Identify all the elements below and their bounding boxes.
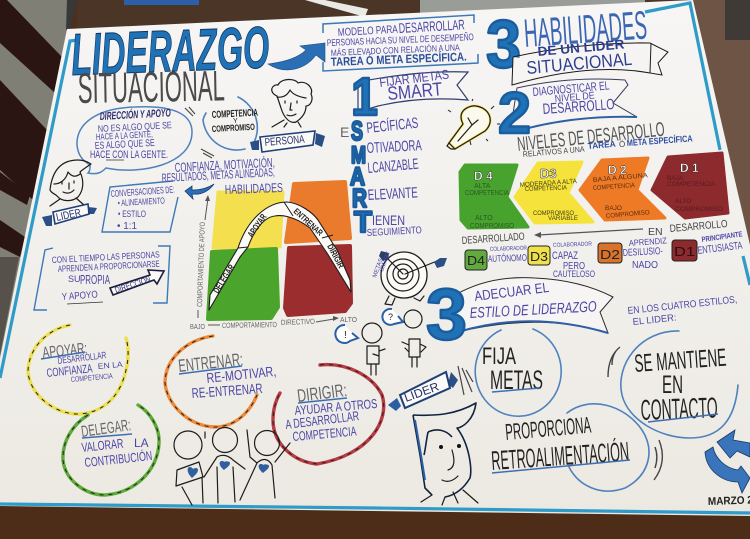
panel: D1 maroon xyxy=(652,153,728,218)
title: SITUACIONAL xyxy=(77,62,225,113)
icon: lider xyxy=(42,160,97,226)
panel: D3 yellow: COMPROMISO xyxy=(533,210,574,217)
circle: fija metas: FIJA xyxy=(482,343,516,370)
banner: diagnosticar: DESARROLLO xyxy=(542,96,615,118)
chart: situational leadership quadrants xyxy=(190,182,357,331)
circle: entrenar: RE-ENTRENAR xyxy=(191,380,263,401)
legend: D3 colaborador xyxy=(528,242,595,279)
panel: D4 green: COMPETENCIA xyxy=(465,190,509,197)
x axis: DIRECTIVO xyxy=(281,317,315,327)
speech bubble: direccion y apoyo: NO ES ALGO QUE SE xyxy=(98,120,172,135)
icon: team with hearts xyxy=(174,428,290,505)
callout: competencia y compromiso: Y xyxy=(233,118,238,125)
legend: D3 colaborador: D3 xyxy=(530,249,548,264)
circle: se mantiene en contacto: EN xyxy=(662,371,683,399)
legend: D4 autonomo xyxy=(465,246,528,270)
quadrant: delegar green xyxy=(208,249,278,319)
circle: apoyar: APOYAR: xyxy=(42,340,88,362)
curve ribbon xyxy=(209,202,351,310)
circle: dirigir: COMPETENCIA xyxy=(292,423,357,444)
arrow: en desarrollo to desarrollado: EN xyxy=(648,226,663,238)
quadrant: apoyar yellow xyxy=(213,192,283,248)
icon: target: SMART xyxy=(379,251,392,273)
heading: niveles de desarrollo: TAREA xyxy=(587,139,616,151)
legend: D3 colaborador: PERO xyxy=(563,261,585,272)
banner: adecuar el estilo xyxy=(455,278,613,333)
panel: D3 yellow: VARIABLE xyxy=(548,215,579,222)
legend: D2 desilusionado: DESILUSIO- xyxy=(623,246,663,259)
arrow: en desarrollo to desarrollado: DESARROLLO xyxy=(669,218,728,235)
panel: con el tiempo: SU xyxy=(68,274,81,284)
banner: de un lider situacional: DE UN LIDER xyxy=(537,36,626,59)
legend: D4 autonomo: D4 xyxy=(467,253,485,268)
x axis xyxy=(190,315,357,331)
list: smart acronym: IENEN xyxy=(372,212,405,228)
number 2: 2 xyxy=(498,81,531,146)
panel: D2 orange: BAJO xyxy=(605,205,622,212)
banner: adecuar el estilo: ADECUAR EL xyxy=(473,279,550,304)
title xyxy=(70,14,270,113)
icon: target: METAS xyxy=(372,258,385,279)
heading: 3 habilidades: 3 xyxy=(486,6,521,82)
circle: proporciona retroalimentacion: PROPORCIONA xyxy=(504,412,592,445)
list: smart acronym: S xyxy=(351,116,363,146)
x axis: BAJO xyxy=(190,322,205,331)
banner: fijar metas smart: SMART xyxy=(387,79,444,105)
list: smart acronym: SEGUIMIENTO xyxy=(367,225,422,239)
circle: apoyar: CONFIANZA xyxy=(46,361,93,380)
circle: delegar: DELEGAR: xyxy=(80,417,132,441)
heading: 3 habilidades xyxy=(486,4,668,85)
text block: en los cuatro estilos: EL LIDER: xyxy=(632,312,677,328)
icon: people talking: ? xyxy=(388,312,393,322)
panel: con el tiempo: APRENDEN A PROPORCIONARSE xyxy=(58,259,160,274)
callout: competencia y compromiso: COMPROMISO xyxy=(212,122,255,134)
panel: conversaciones: CONVERSACIONES DE: xyxy=(110,185,175,200)
panel: D1 maroon: COMPETENCIA xyxy=(667,181,716,188)
banner: de un lider situacional: SITUACIONAL xyxy=(526,49,633,78)
number 3: 3 xyxy=(426,275,467,355)
circle: proporciona retroalimentacion xyxy=(490,404,662,491)
banner: persona: PERSONA xyxy=(264,134,306,149)
banner: diagnosticar xyxy=(510,78,637,133)
panel: D4 green: ALTA xyxy=(474,183,491,190)
curve ribbon: ENTRENAR xyxy=(292,206,325,238)
banner: de un lider situacional xyxy=(512,36,668,85)
banner: diagnosticar: DIAGNOSTICAR EL xyxy=(532,78,610,99)
panel: D4 green: COMPROMISO xyxy=(470,223,514,230)
circle: apoyar: DESARROLLAR xyxy=(57,350,107,367)
list: smart acronym: PECÍFICAS xyxy=(366,115,419,137)
panel: D1 maroon: BAJA xyxy=(667,175,684,182)
icon: light bulb xyxy=(447,99,500,149)
quadrant: dirigir maroon xyxy=(285,246,351,315)
circle: fija metas: METAS xyxy=(490,365,543,395)
panel: con el tiempo xyxy=(34,246,170,310)
list: smart acronym xyxy=(340,115,422,239)
callout: competencia y compromiso: COMPETENCIA xyxy=(212,108,258,121)
arrow: direccion: DIRECCIÓN xyxy=(114,274,152,295)
panel: definition: MÁS ELEVADO CON RELACIÓN A UNA xyxy=(331,42,460,58)
legend: D3 colaborador: COLABORADOR xyxy=(553,242,593,249)
text block: confianza, motivacion xyxy=(161,155,283,197)
circle: apoyar: COMPETENCIA xyxy=(70,371,113,384)
legend: D2 desilusionado: APRENDIZ xyxy=(628,235,667,248)
callout: competencia y compromiso xyxy=(203,97,258,150)
panel: D4 green: D 4 xyxy=(474,169,493,183)
circle: delegar: VALORAR xyxy=(81,436,124,455)
panel: definition: MODELO PARA xyxy=(337,24,399,39)
circle: dirigir xyxy=(273,365,384,464)
circle: dirigir: DIRIGIR: xyxy=(296,380,348,406)
panel: D3 yellow: D3 xyxy=(540,166,557,181)
legend: D4 autonomo: COLABORADOR xyxy=(490,246,528,253)
panel: D3 yellow xyxy=(515,162,593,223)
panel: conversaciones xyxy=(102,181,178,232)
list: smart acronym: E xyxy=(340,124,349,140)
panel: D3 yellow: COMPETENCIA xyxy=(525,185,568,193)
panel: D2 orange xyxy=(580,158,665,220)
legend: D3 colaborador: CAPAZ xyxy=(552,250,578,262)
panel: conversaciones: • ALINEAMIENTO xyxy=(118,196,165,208)
heading: niveles de desarrollo xyxy=(516,119,693,159)
arrow: en desarrollo to desarrollado xyxy=(461,218,728,247)
panel: D1 maroon: COMPROMISO xyxy=(675,206,723,213)
legend: D3 colaborador: CAUTELOSO xyxy=(553,269,595,279)
circle: entrenar xyxy=(165,336,277,427)
curve ribbon: DIRIGIR xyxy=(325,242,346,270)
banner: lider large: LIDER xyxy=(402,379,441,405)
number 1: 1 xyxy=(351,67,378,127)
circle: fija metas xyxy=(458,329,561,416)
legend: D2 desilusionado: NADO xyxy=(632,260,658,271)
quadrant: entrenar orange xyxy=(286,182,350,242)
list: smart acronym: M xyxy=(351,142,366,169)
legend: D4 autonomo: AUTÓNOMO xyxy=(488,253,527,265)
panel: D2 orange: COMPROMISO xyxy=(606,209,650,220)
arrow: en desarrollo to desarrollado: DESARROLLADO xyxy=(461,231,525,247)
panel: D2 orange: COMPETENCIA xyxy=(593,182,636,192)
title: LIDERAZGO xyxy=(70,14,270,88)
panel: definition: PERSONAS HACIA SU NIVEL DE DESEMPEÑO xyxy=(327,32,474,49)
speech bubble: direccion y apoyo: HACE A LA GENTE, xyxy=(96,129,153,142)
heading: niveles de desarrollo: RELATIVOS A UNA xyxy=(522,145,586,159)
curve ribbon: APOYAR xyxy=(245,212,269,239)
circle: dirigir: A DESARROLLAR xyxy=(285,408,360,432)
x axis: COMPORTAMIENTO xyxy=(222,320,277,330)
panel: conversaciones: • 1:1 xyxy=(117,221,137,232)
banner: lider: LIDER xyxy=(55,207,82,224)
text block: confianza, motivacion: RESULTADOS, METAS ALINEADAS, xyxy=(161,165,275,185)
list: smart acronym: LCANZABLE xyxy=(367,156,419,177)
circle: apoyar: EN LA xyxy=(97,360,124,371)
curve ribbon: DELEGAR xyxy=(211,262,237,295)
icon: persona xyxy=(250,79,325,152)
speech bubble: direccion y apoyo xyxy=(77,106,214,174)
icon: people talking xyxy=(335,309,426,375)
list: smart acronym: R xyxy=(352,183,367,213)
banner: diagnosticar: NIVEL DE xyxy=(554,91,595,105)
text block: en los cuatro estilos xyxy=(627,295,738,328)
y axis: COMPORTAMIENTO DE APOYO xyxy=(195,222,207,307)
circle: apoyar xyxy=(28,325,128,414)
icon: target xyxy=(372,251,447,305)
banner: adecuar el estilo: ESTILO DE LIDERAZGO xyxy=(469,298,597,322)
panel: D4 green xyxy=(460,165,528,230)
panel: definition: TAREA Ó META ESPECÍFICA. xyxy=(331,49,467,69)
panel: D1 maroon: D 1 xyxy=(680,161,699,175)
list: smart acronym: A xyxy=(350,163,365,191)
circle: entrenar: RE-MOTIVAR, xyxy=(206,363,277,386)
banner: fijar metas smart: FIJAR METAS xyxy=(379,67,450,90)
x axis: ALTO xyxy=(340,315,357,324)
panel: conversaciones: • ESTILO xyxy=(118,209,146,219)
arrow: title to definition xyxy=(268,43,325,70)
legend: D1 entusiasta xyxy=(672,229,743,261)
panel: D2 orange: D 2 xyxy=(608,163,627,177)
speech bubble: direccion y apoyo: HACE CON LA GENTE. xyxy=(90,149,168,161)
panel: D3 yellow: MODERADA A ALTA xyxy=(520,178,578,189)
markers on the table xyxy=(124,0,368,17)
speech bubble: direccion y apoyo: DIRECCIÓN Y APOYO xyxy=(99,106,171,123)
legend: D2 desilusionado xyxy=(598,235,667,271)
list: smart acronym: T xyxy=(354,206,372,239)
legend: D2 desilusionado: D2 xyxy=(600,247,620,262)
heading: niveles de desarrollo: Ó xyxy=(619,140,625,149)
panel: D2 orange: BAJA A ALGUNA xyxy=(593,172,649,184)
heading: niveles de desarrollo: META ESPECÍFICA xyxy=(626,133,693,148)
circle: entrenar: ENTRENAR: xyxy=(177,349,244,376)
panel: definition xyxy=(323,15,478,71)
panel: con el tiempo: PROPIA xyxy=(80,272,110,287)
icon: lider large xyxy=(388,372,478,505)
panel: D1 maroon: ALTO xyxy=(675,198,691,205)
panel: con el tiempo: Y APOYO xyxy=(61,289,98,303)
circle: dirigir: AYUDAR A OTROS xyxy=(294,396,378,418)
panel: con el tiempo: CON EL TIEMPO LAS PERSONAS xyxy=(52,249,160,265)
legend: D1 entusiasta: D1 xyxy=(674,244,695,259)
icon: people talking: ! xyxy=(344,330,347,341)
banner: fijar metas smart xyxy=(358,67,468,112)
icon: cycle arrows xyxy=(705,430,750,493)
speech bubble: direccion y apoyo: ES ALGO QUE SE xyxy=(95,138,155,152)
circle: delegar: LA xyxy=(134,436,149,450)
list: smart acronym: ELEVANTE xyxy=(367,184,418,204)
text block: confianza, motivacion: HABILIDADES xyxy=(225,180,283,197)
circle: se mantiene en contacto xyxy=(608,331,738,438)
circle: delegar xyxy=(63,405,159,495)
arrow: towards conversaciones xyxy=(185,184,214,199)
text block: confianza, motivacion: CONFIANZA, MOTIVACIÓN, xyxy=(174,155,275,175)
list: smart acronym: OTIVADORA xyxy=(366,137,422,157)
panel: D4 green: ALTO xyxy=(475,215,493,222)
circle: delegar: CONTRIBUCIÓN xyxy=(84,448,153,470)
panel: definition: DESARROLLAR xyxy=(398,16,465,36)
